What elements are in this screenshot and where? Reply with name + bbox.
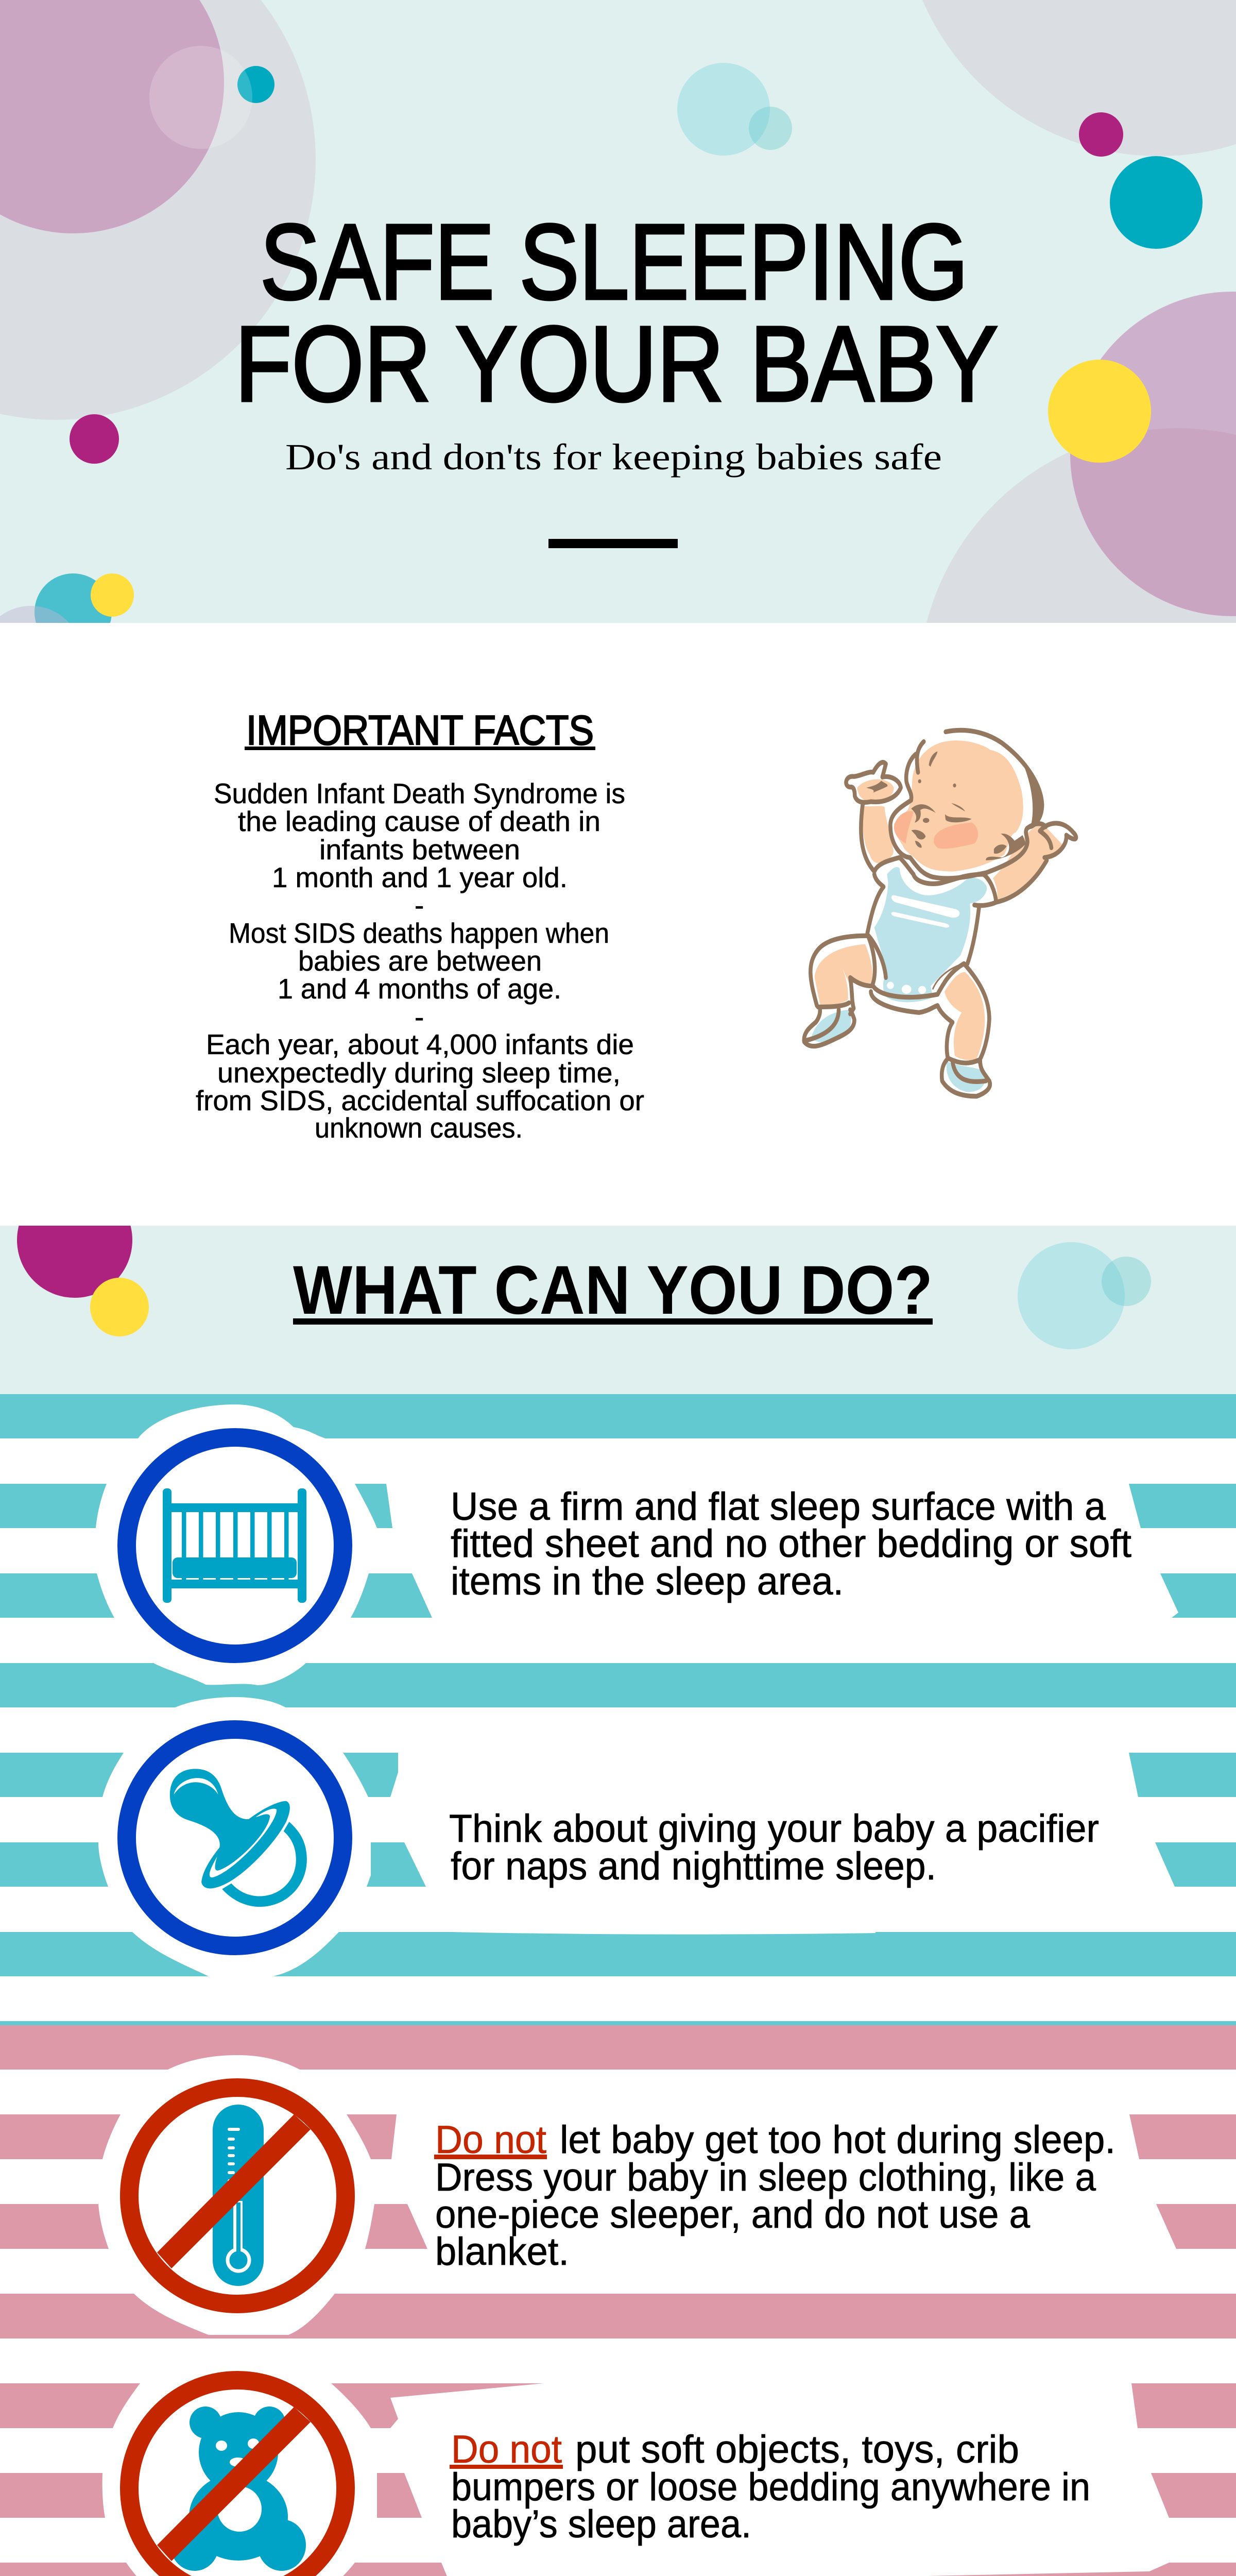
- decorative circles: left magenta: [70, 414, 119, 464]
- text block: fact three: from SIDS, accidental suffocation or: [196, 1084, 644, 1116]
- text block: fact three: [196, 1028, 644, 1144]
- white brush backing: icon: [98, 1697, 376, 1976]
- icon: no teddy bear: [129, 2380, 346, 2576]
- decorative circles: lower right: [926, 292, 1236, 623]
- brush edge along lower stripe: [453, 1931, 876, 1935]
- text block: soft objects: bumpers or loose bedding anywhere in: [451, 2465, 1090, 2509]
- text block: fact one: 1 month and 1 year old.: [272, 861, 568, 893]
- divider dash: -: [415, 889, 424, 921]
- decorative circles: top centre: [677, 63, 792, 156]
- panel: do item one, crib: [95, 1404, 1178, 1685]
- text block: too hot: Dress your baby in sleep clothing, like a: [435, 2156, 1096, 2199]
- illustration: sleeping baby: [804, 730, 1076, 1096]
- text block: fact one: [214, 777, 625, 893]
- text block: fact one: the leading cause of death in: [238, 805, 600, 837]
- text block: firm and flat surface: [451, 1485, 1131, 1603]
- white brush backing: icon: [102, 2383, 377, 2576]
- text block: firm and flat surface: items in the sleep area.: [451, 1560, 844, 1603]
- text block: fact two: [229, 917, 609, 1005]
- text block: fact one: infants between: [319, 834, 520, 866]
- white brush backing: icon: [98, 2055, 379, 2335]
- heading: what can you do: WHAT CAN YOU DO?: [293, 1252, 933, 1329]
- text block: too hot: blanket.: [435, 2230, 569, 2274]
- text block: soft objects: baby’s sleep area.: [451, 2502, 751, 2546]
- icon: pacifier: [127, 1730, 343, 1946]
- text block: soft objects: put soft objects, toys, crib: [575, 2428, 1019, 2471]
- panel: do item two, pacifier: [98, 1697, 1175, 1976]
- text block: firm and flat surface: fitted sheet and no other bedding or soft: [451, 1522, 1131, 1566]
- icon: no thermometer: [129, 2088, 346, 2304]
- divider dash: -: [415, 1001, 424, 1033]
- title rule: [548, 539, 678, 548]
- text block: fact two: Most SIDS deaths happen when: [229, 917, 609, 949]
- panel: important facts: [196, 707, 644, 1144]
- text block: too hot: let baby get too hot during sleep.: [560, 2118, 1115, 2162]
- white brush backing: text: [391, 2110, 1176, 2249]
- panel: header: [0, 0, 1236, 623]
- panel: don't item two, soft objects: [102, 2380, 1169, 2576]
- panel: do stripes: [0, 1394, 1236, 2025]
- icon: crib: [127, 1437, 343, 1654]
- white brush backing: text: [386, 1479, 1178, 1618]
- title: [235, 202, 998, 424]
- text block: firm and flat surface: Use a firm and flat sleep surface with a: [451, 1485, 1106, 1529]
- heading: important facts: IMPORTANT FACTS: [246, 707, 594, 754]
- text block: pacifier advice: [449, 1807, 1099, 1888]
- title: FOR YOUR BABY: [235, 304, 998, 424]
- text block: fact three: unknown causes.: [315, 1112, 523, 1144]
- panel: what can you do heading band: [0, 1182, 1236, 1394]
- text block: soft objects: [450, 2428, 1090, 2546]
- white brush backing: text: [390, 2383, 1169, 2576]
- text block: too hot: [434, 2118, 1115, 2274]
- text block: fact three: Each year, about 4,000 infants die: [206, 1028, 634, 1060]
- do not emphasis: Do not: [451, 2428, 562, 2471]
- text block: fact two: 1 and 4 months of age.: [278, 973, 561, 1005]
- decorative circles: bottom left: [0, 573, 134, 709]
- text block: pacifier advice: Think about giving your baby a pacifier: [449, 1807, 1099, 1851]
- text block: fact two: babies are between: [298, 945, 542, 977]
- panel: don't item one, overheating: [98, 2055, 1176, 2335]
- do not emphasis: Do not: [435, 2118, 546, 2162]
- text block: pacifier advice: for naps and nighttime sleep.: [451, 1844, 936, 1888]
- white brush backing: icon: [95, 1404, 381, 1685]
- decorative circles: top right: [902, 0, 1236, 249]
- white brush backing: text: [390, 1749, 1175, 1887]
- title: SAFE SLEEPING: [260, 202, 968, 322]
- text block: fact three: unexpectedly during sleep time,: [217, 1057, 621, 1089]
- decorative circles: right: [1018, 1242, 1151, 1349]
- text block: fact one: Sudden Infant Death Syndrome is: [214, 777, 625, 809]
- decorative circles: top left cluster: [0, 0, 316, 420]
- panel: don't stripes: [0, 2025, 1236, 2576]
- text block: too hot: one-piece sleeper, and do not use a: [435, 2193, 1031, 2236]
- subtitle: Do's and don'ts for keeping babies safe: [285, 436, 942, 478]
- decorative circles: left: [17, 1182, 149, 1336]
